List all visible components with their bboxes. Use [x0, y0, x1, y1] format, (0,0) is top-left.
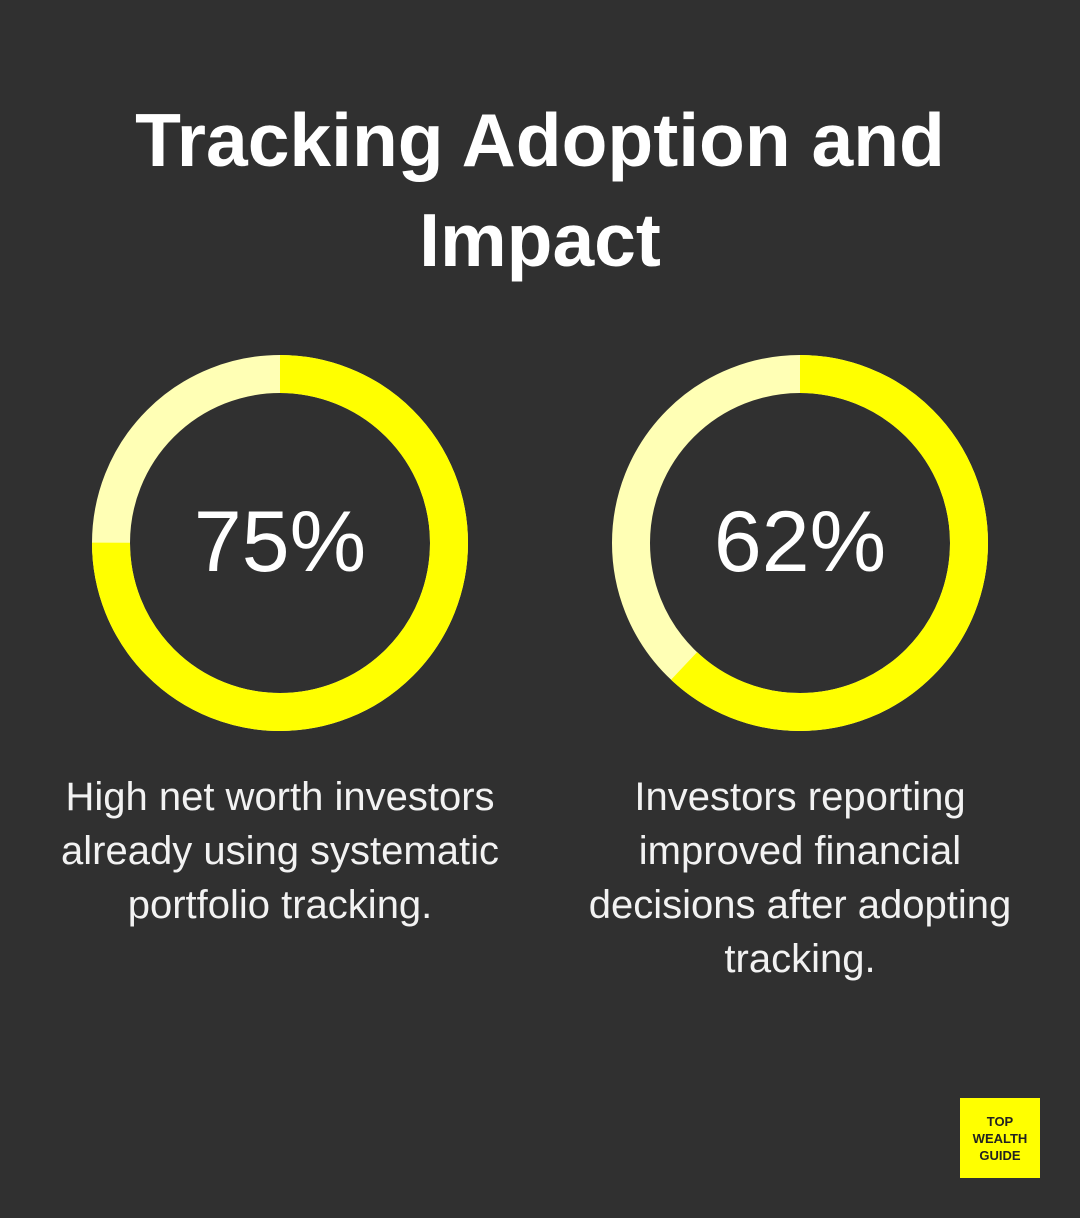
- logo: GUIDE: [979, 1148, 1021, 1162]
- donut: 62%: [631, 374, 969, 712]
- logo: WEALTH: [973, 1130, 1027, 1146]
- donut: 75%: 75%: [194, 494, 366, 590]
- title: [135, 98, 945, 282]
- donut: 62%: 62%: [714, 494, 886, 590]
- title: Tracking Adoption and: [135, 98, 945, 182]
- logo: [960, 1098, 1040, 1178]
- donut: 75%: [111, 374, 449, 712]
- title: Impact: [419, 198, 661, 282]
- text: right description: Investors reporting improved financial decisions after adopting tracking.: [589, 775, 1011, 981]
- logo: TOP: [987, 1114, 1013, 1128]
- text: left description: High net worth investors already using systematic portfolio tracking.: [61, 775, 499, 927]
